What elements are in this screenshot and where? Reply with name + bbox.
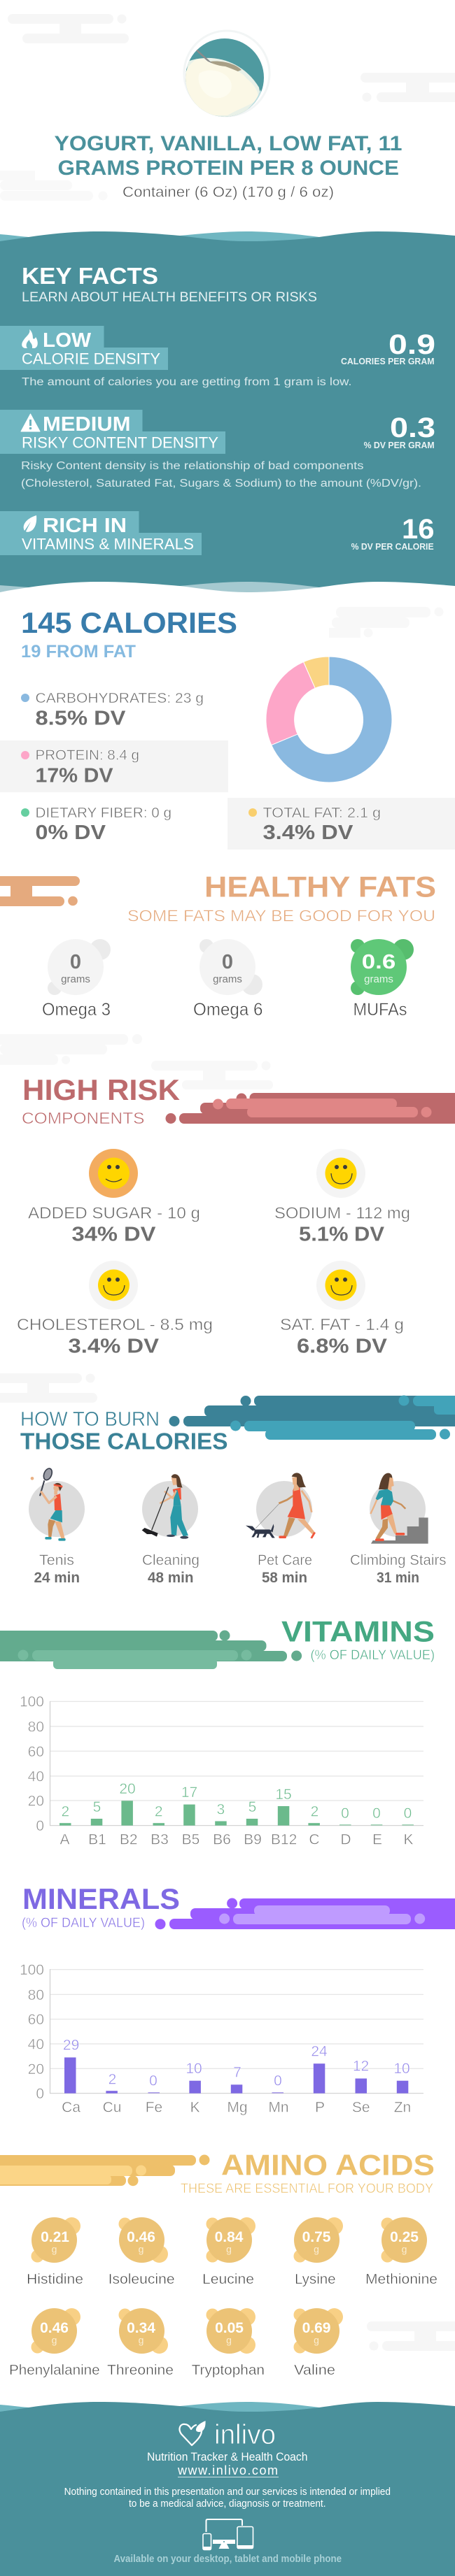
bar chart: minerals: 12	[353, 2059, 369, 2075]
bar chart: minerals: 40	[28, 2036, 44, 2053]
heading: AMINO ACIDS	[221, 2149, 435, 2182]
amino acid: lysine: g	[314, 2244, 319, 2255]
icon: person climbing stairs	[370, 1473, 428, 1544]
serving size: Container (6 Oz) (170 g / 6 oz)	[122, 185, 334, 201]
bar chart: minerals: 20	[28, 2061, 44, 2077]
heading: HEALTHY FATS	[204, 871, 436, 903]
tagline: Nutrition Tracker & Health Coach	[147, 2450, 308, 2463]
amino acid: threonine: 0.34	[127, 2320, 155, 2336]
bar chart: vitamins: B3	[150, 1831, 169, 1847]
fact: medium risky content density: % DV PER GRAM	[364, 441, 435, 450]
fat: MUFAs: 0.6	[362, 951, 396, 973]
decoration: high risk bars	[165, 1093, 455, 1124]
activity: pet care: Pet Care	[258, 1552, 312, 1568]
activity: climbing stairs: 31 min	[377, 1570, 419, 1586]
risk: cholesterol: CHOLESTEROL - 8.5 mg	[17, 1315, 213, 1333]
bar chart: vitamins: 80	[28, 1719, 44, 1736]
bar chart: vitamins: 20	[119, 1781, 136, 1797]
amino acid: isoleucine	[108, 2217, 175, 2287]
amino acid: valine: g	[314, 2335, 319, 2346]
bar chart: vitamins: A	[59, 1831, 70, 1847]
amino acid: valine: Valine	[294, 2363, 335, 2378]
availability note: Available on your desktop, tablet and mobile phone	[113, 2553, 342, 2565]
macro: total fat	[227, 798, 455, 850]
bar chart: vitamins: B5	[182, 1831, 200, 1847]
fact: medium risky content density: Risky Content density is the relationship of bad components	[21, 460, 364, 472]
amino acid: tryptophan: Tryptophan	[192, 2363, 265, 2378]
title: YOGURT, VANILLA, LOW FAT, 11	[55, 132, 402, 155]
amino acid: methionine	[365, 2217, 438, 2287]
bar chart: minerals: Ca	[62, 2100, 80, 2116]
risk: sodium: SODIUM - 112 mg	[274, 1204, 410, 1222]
icon: person sweeping	[142, 1474, 198, 1539]
amino acid: threonine: Threonine	[107, 2363, 174, 2378]
risk: saturated fat	[280, 1261, 404, 1358]
activity: cleaning: 48 min	[148, 1570, 193, 1586]
amino acid: leucine	[202, 2217, 255, 2287]
fact: low calorie density: The amount of calories you are getting from 1 gram is low.	[22, 376, 351, 388]
bar chart: vitamins: 2	[311, 1804, 318, 1820]
decoration: amino acid bars	[0, 2155, 210, 2186]
bar chart: vitamins: 40	[28, 1769, 44, 1784]
macro: dietary fiber: DIETARY FIBER: 0 g	[35, 806, 172, 821]
amino acid: lysine: Lysine	[295, 2272, 336, 2287]
bar chart: vitamins: 100	[20, 1694, 44, 1710]
fat: omega 6: 0	[222, 951, 233, 973]
subheading: (% OF DAILY VALUE)	[311, 1648, 435, 1663]
amino acid: threonine	[107, 2308, 174, 2378]
risk: saturated fat: 6.8% DV	[297, 1336, 388, 1358]
heading: KEY FACTS	[22, 263, 158, 289]
panel: vitamins	[0, 1615, 435, 1847]
macro: total fat: TOTAL FAT: 2.1 g	[263, 806, 381, 821]
bar chart: vitamins: C	[309, 1831, 320, 1847]
fact: medium risky content density: RISKY CONTENT DENSITY	[22, 434, 218, 452]
macro: carbohydrates: 8.5% DV	[35, 708, 126, 730]
macro: protein: PROTEIN: 8.4 g	[35, 748, 139, 764]
amino acid: phenylalanine	[9, 2308, 100, 2378]
bar chart: minerals: 2	[108, 2072, 116, 2088]
bar chart: vitamins: 5	[93, 1799, 101, 1815]
bar chart: minerals: 10	[186, 2061, 202, 2077]
bar chart: minerals: 100	[20, 1962, 44, 1978]
panel: key facts	[0, 231, 455, 603]
fat: omega 3: 0	[70, 951, 81, 973]
fat: MUFAs: grams	[364, 973, 393, 985]
panel: how to burn those calories	[20, 1396, 455, 1586]
subheading: LEARN ABOUT HEALTH BENEFITS OR RISKS	[22, 290, 317, 305]
bar chart: vitamins: 17	[181, 1784, 197, 1801]
fact: rich in vitamins and minerals: RICH IN	[43, 515, 127, 537]
bar chart: vitamins: B6	[213, 1831, 231, 1847]
subheading: THESE ARE ESSENTIAL FOR YOUR BODY	[181, 2182, 433, 2196]
panel: high risk components	[17, 1073, 455, 1358]
amino acid: phenylalanine: g	[52, 2335, 57, 2346]
activity: tennis: 24 min	[34, 1570, 80, 1586]
bar chart: minerals: K	[190, 2100, 200, 2116]
bar chart: vitamins: 2	[61, 1804, 69, 1820]
icon: warning triangle	[21, 414, 40, 431]
disclaimer: Nothing contained in this presentation and our services is intended or implied	[64, 2486, 391, 2498]
fat: MUFAs	[351, 939, 414, 1019]
bar chart: vitamins: B1	[88, 1831, 106, 1847]
fat: omega 6: Omega 6	[193, 1000, 263, 1019]
bar chart: minerals: 7	[233, 2065, 241, 2081]
amino acid: methionine: g	[402, 2244, 407, 2255]
amino acid: tryptophan: 0.05	[215, 2320, 244, 2336]
bar chart: vitamins: 0	[36, 1818, 44, 1834]
amino acid: phenylalanine: 0.46	[40, 2320, 69, 2336]
fat: omega 3: grams	[61, 973, 90, 985]
risk: added sugar	[28, 1149, 200, 1246]
amino acid: histidine: Histidine	[27, 2272, 83, 2287]
risk: cholesterol: 3.4% DV	[69, 1336, 160, 1358]
bar chart: vitamins: 3	[217, 1801, 225, 1817]
subheading: (% OF DAILY VALUE)	[22, 1916, 145, 1931]
fact: medium risky content density: (Cholesterol, Saturated Fat, Sugars & Sodium) to the amount (%DV/gr).	[21, 478, 421, 489]
panel: healthy fats	[0, 871, 436, 1019]
bar chart: minerals: Mg	[227, 2100, 248, 2116]
bar chart: minerals: 0	[149, 2073, 158, 2089]
activity: cleaning: Cleaning	[142, 1552, 200, 1568]
subheading: SOME FATS MAY BE GOOD FOR YOU	[127, 907, 435, 925]
fact: low calorie density: 0.9	[388, 329, 435, 360]
bar chart: minerals: 24	[311, 2044, 328, 2060]
activity: cleaning	[142, 1474, 200, 1586]
decoration: vitamins bars	[0, 1631, 302, 1669]
macro: protein: 17% DV	[35, 764, 113, 787]
panel: header	[0, 14, 455, 201]
panel: minerals	[20, 1882, 455, 2116]
icon: devices	[203, 2519, 253, 2549]
bar chart: minerals: Zn	[394, 2100, 411, 2116]
bar chart: minerals: 29	[63, 2038, 79, 2054]
amino acid: leucine: 0.84	[215, 2229, 244, 2245]
bar chart: minerals: 0	[274, 2073, 282, 2089]
fact: rich in vitamins and minerals	[0, 511, 434, 555]
bar chart: vitamins: 0	[341, 1805, 349, 1822]
heading: 145 CALORIES	[21, 606, 237, 639]
bar chart: vitamins: B12	[271, 1831, 297, 1847]
bar chart: vitamins: E	[372, 1831, 382, 1847]
amino acid: methionine: Methionine	[365, 2272, 438, 2287]
risk: sodium	[274, 1149, 410, 1246]
donut chart	[266, 657, 392, 782]
risk: added sugar: ADDED SUGAR - 10 g	[28, 1204, 200, 1222]
website link: www.inlivo.com	[177, 2463, 278, 2477]
bar chart: minerals: 80	[28, 1987, 44, 2003]
icon: leaf	[24, 515, 36, 532]
risk: added sugar: 34% DV	[71, 1224, 156, 1246]
heading: HIGH RISK	[22, 1073, 180, 1106]
bar chart: vitamins: 15	[275, 1787, 292, 1803]
amino acid: lysine: 0.75	[302, 2229, 331, 2245]
icon: flame	[22, 329, 38, 348]
bar chart: vitamins: 0	[372, 1805, 381, 1822]
bar chart: vitamins: 20	[28, 1793, 44, 1810]
food photo: yogurt	[183, 31, 270, 119]
macro: carbohydrates	[21, 691, 204, 730]
fact: low calorie density: LOW	[43, 329, 92, 352]
activity: climbing stairs	[350, 1473, 447, 1586]
logo: inlivo	[180, 2419, 276, 2450]
fat: omega 3	[42, 939, 111, 1019]
activity: pet care: 58 min	[262, 1570, 307, 1586]
subheading: COMPONENTS	[22, 1109, 144, 1127]
heading: VITAMINS	[281, 1615, 435, 1648]
macro: carbohydrates: CARBOHYDRATES: 23 g	[35, 691, 204, 706]
disclaimer	[64, 2486, 391, 2510]
bar chart: minerals: Se	[352, 2100, 370, 2116]
activity: tennis: Tenis	[39, 1552, 74, 1568]
amino acid: phenylalanine: Phenylalanine	[9, 2363, 100, 2378]
amino acid: tryptophan	[192, 2308, 265, 2378]
bar chart: minerals: P	[315, 2100, 325, 2116]
fact: medium risky content density: 0.3	[390, 413, 435, 443]
fact: medium risky content density	[0, 410, 435, 489]
decoration: healthy fats bars	[0, 876, 80, 906]
bar chart: vitamins: B2	[120, 1831, 138, 1847]
heading: HOW TO BURN	[20, 1408, 160, 1431]
bar chart: minerals	[20, 1962, 424, 2116]
title: GRAMS PROTEIN PER 8 OUNCE	[57, 157, 399, 180]
fat: omega 6: grams	[213, 973, 242, 985]
fat: MUFAs: MUFAs	[353, 1000, 407, 1019]
bar chart: vitamins: 0	[404, 1805, 412, 1822]
bar chart: vitamins: 60	[28, 1744, 44, 1760]
activity: tennis	[29, 1467, 85, 1586]
bar chart: minerals: 0	[36, 2086, 44, 2102]
bar chart: vitamins: 5	[248, 1799, 256, 1815]
subheading: 19 FROM FAT	[21, 642, 136, 661]
risk: cholesterol	[17, 1261, 213, 1358]
amino acid: histidine: g	[52, 2244, 57, 2255]
bar chart: minerals: Mn	[268, 2100, 289, 2116]
risk: saturated fat: SAT. FAT - 1.4 g	[280, 1315, 404, 1333]
amino acid: isoleucine: 0.46	[127, 2229, 155, 2245]
panel: calories	[0, 606, 455, 850]
activity: climbing stairs: Climbing Stairs	[350, 1552, 447, 1568]
macro: dietary fiber	[21, 806, 172, 844]
amino acid: histidine: 0.21	[41, 2229, 69, 2245]
amino acid: isoleucine: Isoleucine	[108, 2272, 175, 2287]
title	[55, 132, 402, 180]
fact: low calorie density	[0, 326, 435, 388]
fat: omega 6	[193, 939, 263, 1019]
fact: rich in vitamins and minerals: VITAMINS & MINERALS	[22, 536, 194, 553]
logo: inlivo: inlivo	[214, 2419, 276, 2450]
amino acid: leucine: g	[226, 2244, 232, 2255]
risk: sodium: 5.1% DV	[299, 1224, 385, 1246]
fact: rich in vitamins and minerals: 16	[402, 514, 434, 545]
panel: amino acids	[0, 2149, 455, 2378]
amino acid: tryptophan: g	[226, 2335, 232, 2346]
bar chart: vitamins	[20, 1694, 424, 1847]
bar chart: minerals: Cu	[103, 2100, 121, 2116]
activity: pet care	[246, 1473, 316, 1586]
fact: low calorie density: CALORIE DENSITY	[22, 350, 160, 368]
panel: how to burn those calories: THOSE CALORIES	[20, 1429, 228, 1454]
decoration: burn bars	[169, 1396, 455, 1440]
macro: total fat: 3.4% DV	[263, 822, 354, 844]
amino acid: threonine: g	[139, 2335, 144, 2346]
macro: dietary fiber: 0% DV	[35, 822, 106, 844]
amino acid: leucine: Leucine	[202, 2272, 254, 2287]
amino acid: histidine	[27, 2217, 83, 2287]
amino acid: isoleucine: g	[139, 2244, 144, 2255]
bar chart: minerals: 10	[393, 2061, 410, 2077]
decoration: minerals bars	[155, 1898, 455, 1929]
bar chart: vitamins: B9	[244, 1831, 262, 1847]
icon: tennis player	[29, 1467, 85, 1541]
fact: rich in vitamins and minerals: % DV PER CALORIE	[351, 542, 434, 552]
bar chart: minerals: Fe	[146, 2100, 162, 2116]
bar chart: minerals: 60	[28, 2012, 44, 2028]
fat: omega 3: Omega 3	[42, 1000, 111, 1019]
bar chart: vitamins: 2	[155, 1804, 163, 1820]
bar chart: vitamins: K	[403, 1831, 414, 1847]
icon: person walking dog	[246, 1473, 316, 1538]
amino acid: lysine	[294, 2217, 343, 2287]
panel: footer	[0, 2402, 455, 2576]
amino acid: valine: 0.69	[302, 2320, 330, 2336]
heading: MINERALS	[22, 1882, 180, 1915]
disclaimer: to be a medical advice, diagnosis or treatment.	[129, 2498, 326, 2510]
fact: low calorie density: CALORIES PER GRAM	[341, 357, 434, 366]
macro: protein	[0, 740, 228, 792]
amino acid: methionine: 0.25	[390, 2229, 419, 2245]
amino acid: valine	[294, 2308, 343, 2378]
bar chart: vitamins: D	[340, 1831, 351, 1847]
fact: medium risky content density: MEDIUM	[43, 413, 130, 436]
